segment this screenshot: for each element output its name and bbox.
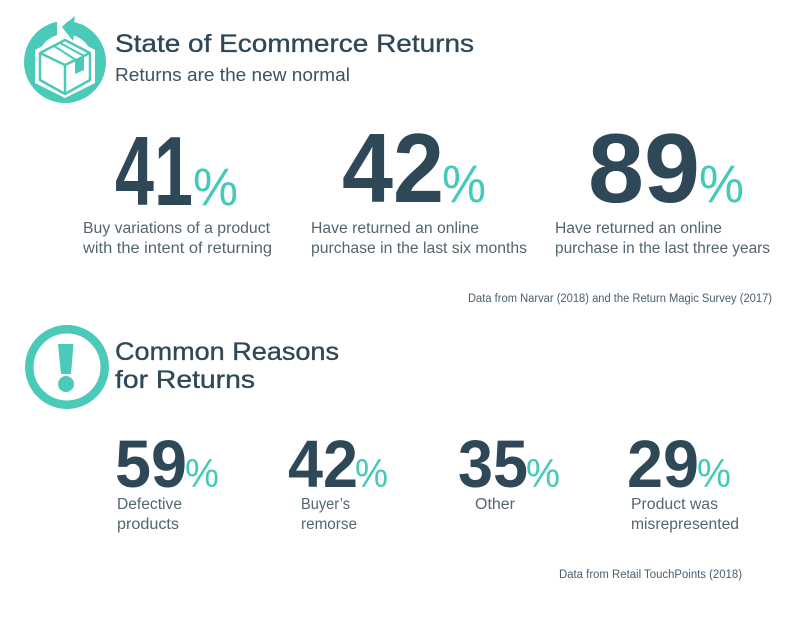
reason: 59%: [115, 427, 219, 533]
caption: Buyer’s: [301, 496, 350, 513]
percent sign: %: [526, 452, 560, 496]
caption: with the intent of returning: [82, 240, 272, 257]
number 89: 89: [588, 113, 700, 223]
number 42: 42: [342, 113, 444, 223]
reason: 29%: [627, 427, 739, 533]
percent sign: %: [355, 452, 388, 496]
reason: 42%: [288, 427, 388, 533]
subtitle: Returns are the new normal: [115, 65, 350, 85]
reason: 35%: [458, 427, 560, 513]
caption: purchase in the last three years: [555, 240, 770, 257]
heading: common reasons: Common Reasons: [115, 338, 339, 366]
number 59: 59: [115, 427, 187, 502]
percent sign: %: [185, 452, 219, 496]
stat: 42%: [311, 113, 527, 257]
caption: Other: [475, 496, 515, 513]
caption: remorse: [301, 516, 357, 533]
number 41: 41: [115, 116, 193, 226]
source note: reasons: Data from Retail TouchPoints (2018): [559, 569, 742, 581]
caption: products: [117, 516, 179, 533]
stat: 89%: [555, 113, 770, 257]
number 35: 35: [458, 427, 528, 502]
caption: Product was: [631, 496, 718, 513]
source note: returns: Data from Narvar (2018) and the Return Magic Survey (2017): [468, 293, 772, 305]
caption: Have returned an online: [555, 220, 722, 237]
percent sign: %: [699, 155, 744, 214]
caption: Have returned an online: [311, 220, 479, 237]
caption: Defective: [117, 496, 182, 513]
caption: Buy variations of a product: [83, 220, 271, 237]
percent sign: %: [193, 158, 238, 217]
stat: 41%: [82, 116, 272, 257]
caption: purchase in the last six months: [311, 240, 527, 257]
icon: exclamation: [29, 329, 105, 405]
heading: common reasons: for Returns: [115, 366, 255, 394]
caption: misrepresented: [631, 516, 739, 533]
percent sign: %: [697, 452, 731, 496]
number 29: 29: [627, 427, 699, 502]
number 42: 42: [288, 427, 358, 502]
title: State of Ecommerce Returns: [115, 30, 474, 58]
icon: returned package: [24, 14, 106, 103]
percent sign: %: [442, 155, 486, 214]
